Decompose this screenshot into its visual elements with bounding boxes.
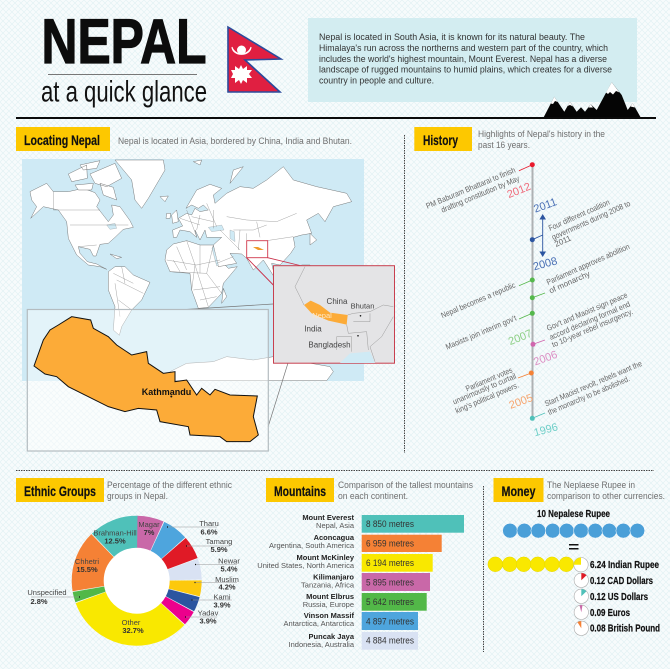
heading: Locating Nepal: Locating Nepal <box>24 132 100 148</box>
donut labels: 5.4% <box>220 564 238 574</box>
donut labels: Chhetri <box>75 557 99 566</box>
timeline event: 2007: Maoists join interim gov't <box>444 313 518 352</box>
panel: introduction: includes the world's highest mountain, Mount Everest. Nepal has a diverse <box>319 54 607 64</box>
panel: introduction: country in people and culture. <box>319 76 434 86</box>
heading: Locating Nepal <box>16 127 110 151</box>
timeline event: 1996: 1996 <box>533 421 559 439</box>
timeline event: abolition of monarchy: of monarchy <box>548 269 592 295</box>
donut labels: Magar <box>138 520 160 529</box>
donut labels: 12.5% <box>104 536 126 546</box>
pie wedges <box>574 558 586 628</box>
timeline event: 2012: 2012 <box>505 181 533 201</box>
panel: regional inset map <box>247 258 394 363</box>
timeline event: 1996 <box>530 359 644 439</box>
chart: mountains bar chart: Aconcagua <box>314 533 355 542</box>
chart: mountains bar chart: 5 642 metres <box>366 597 414 607</box>
heading: History: History <box>423 132 458 148</box>
timeline event: 1996: Start Maoist revolt, rebels want the <box>543 359 644 408</box>
text: locating description: Nepal is located in Asia, bordered by China, India and Bhutan. <box>118 136 352 146</box>
chart: mountains bar chart: Mount McKinley <box>296 553 355 562</box>
chart: mountains bar chart: Mount Everest <box>302 513 354 522</box>
chart: mountains bar chart: 4 897 metres <box>366 616 414 626</box>
text: money description: The Neplaese Rupee in <box>547 480 635 490</box>
timeline event: 2006: 2006 <box>532 349 559 368</box>
donut labels: Muslim <box>215 575 239 584</box>
map highlight: Nepal locator <box>247 241 268 258</box>
panel: Nepal enlarged map: Kathmandu <box>142 387 191 397</box>
panel: regional inset map: India <box>304 324 322 334</box>
currency labels <box>590 560 660 634</box>
donut labels: 5.9% <box>210 545 228 554</box>
text: history description: Highlights of Nepal's history in the <box>478 129 605 139</box>
chart: mountains bar chart: Vinson Massif <box>304 611 354 620</box>
donut labels: Other <box>122 618 141 627</box>
chart: mountains bar chart: 4 884 metres <box>366 636 414 646</box>
donut labels: Newar <box>218 556 240 566</box>
timeline event: republic: Nepal becomes a republic <box>440 281 517 320</box>
title: NEPAL <box>42 7 206 77</box>
heading: Mountains <box>266 478 334 502</box>
map: South America <box>108 267 150 335</box>
timeline event: 2012: PM Baburam Bhattarai to finish <box>425 166 517 211</box>
text: history description <box>478 129 605 150</box>
donut labels: 3.9% <box>213 600 231 610</box>
timeline event: abolition of monarchy: Parliament approves abolition <box>545 242 631 287</box>
timeline event: 2006 <box>530 290 634 368</box>
timeline event: 2005: unanimously to curtail <box>451 371 518 406</box>
equals sign <box>569 544 578 550</box>
timeline event: 2008 to 2011: 2011 <box>553 233 573 249</box>
map: Antarctica <box>167 357 333 381</box>
map: Africa <box>165 241 237 308</box>
chart: history timeline <box>425 162 644 439</box>
chart: mountains bar chart: Kilimanjaro <box>313 572 354 582</box>
donut labels: Tharu <box>199 519 219 528</box>
map: North America <box>30 183 133 269</box>
chart: mountains bar chart: Russia, Europe <box>303 600 354 609</box>
panel: regional inset map: Nepal <box>312 311 332 320</box>
divider: money <box>482 486 484 652</box>
chart: mountains bar chart: Tanzania, Africa <box>301 580 355 590</box>
divider: header <box>16 117 656 119</box>
donut labels <box>27 519 240 635</box>
heading: Ethnic Groups <box>16 478 104 502</box>
chart: mountains bar chart: Antarctica, Antarctica <box>284 619 355 628</box>
timeline event: 2012: drafting constitution by May <box>440 174 521 215</box>
panel: introduction: Nepal is located in South Asia, it is known for its natural beauty. The <box>319 32 585 42</box>
panel: regional inset map: Bhutan <box>351 302 374 310</box>
chart: currency comparison <box>488 509 660 636</box>
currency labels: 0.12 US Dollars <box>590 592 648 603</box>
donut labels: 32.7% <box>122 626 144 635</box>
chart: mountains bar chart: Nepal, Asia <box>316 521 355 530</box>
coins: Indian Rupee <box>488 557 574 572</box>
map: Arctic islands <box>68 161 122 200</box>
text: ethnic description: groups in Nepal. <box>107 491 168 501</box>
coins: 10 Nepalese Rupee <box>503 523 645 538</box>
timeline event: 2008 to 2011: governments during 2008 to <box>550 199 632 242</box>
timeline event: abolition of monarchy <box>530 242 631 300</box>
timeline event: 2005: Parliament votes <box>464 366 514 393</box>
donut labels: Tamang <box>206 537 232 546</box>
divider: history <box>404 135 406 453</box>
map: Greenland <box>115 160 165 208</box>
text: ethnic description: Percentage of the different ethnic <box>107 480 232 490</box>
icon: mountains <box>543 82 641 118</box>
text: mountains description: Comparison of the tallest mountains <box>338 480 473 490</box>
timeline event: 2005: king's political powers. <box>454 381 520 415</box>
chart: mountains bar chart: Puncak Jaya <box>309 632 355 641</box>
timeline event: 2008 to 2011: 2011 <box>532 196 559 216</box>
fraction pies <box>574 558 588 636</box>
map: country borders <box>53 192 297 317</box>
chart: mountains bar chart: 6 959 metres <box>366 538 414 548</box>
text: mountains description <box>338 480 473 501</box>
donut labels: 6.6% <box>200 528 218 536</box>
donut labels: Brahman-Hill <box>93 528 137 538</box>
donut labels: 2.8% <box>30 597 48 606</box>
timeline event: 2008 to 2011: Four different coalition <box>547 198 611 233</box>
icon: flag of Nepal <box>228 27 281 92</box>
currency labels: 0.12 CAD Dollars <box>590 576 653 587</box>
heading: Mountains: Mountains <box>274 483 326 499</box>
timeline event: 2006: to 10-year rebel insurgency. <box>551 307 634 349</box>
donut labels: Unspecified <box>27 588 67 597</box>
divider: lower section <box>16 470 654 472</box>
chart: mountains bar chart: United States, North America <box>257 561 355 570</box>
chart: currency comparison: 10 Nepalese Rupee <box>537 509 610 520</box>
donut labels: Yadav <box>198 608 219 618</box>
chart: mountains bar chart: Mount Elbrus <box>306 592 354 601</box>
chart: mountains bar chart <box>257 513 464 650</box>
timeline event: 2008 to 2011 <box>530 196 632 273</box>
text: mountains description: on each continent. <box>338 491 408 501</box>
title <box>41 7 207 108</box>
chart: mountains bar chart: Indonesia, Australia <box>289 640 355 649</box>
currency labels: 0.09 Euros <box>590 608 630 619</box>
chart: mountains bar chart: 8 850 metres <box>366 519 414 529</box>
timeline event: 2006: accord declaring formal end <box>548 300 632 342</box>
heading: Ethnic Groups: Ethnic Groups <box>24 483 96 499</box>
title: at a quick glance <box>41 76 207 108</box>
chart: mountains bar chart: Argentina, South America <box>269 541 355 550</box>
heading: Money <box>494 478 544 502</box>
heading: History <box>414 127 472 151</box>
map: Eurasia <box>173 167 352 278</box>
heading: Money: Money <box>502 483 536 499</box>
chart: mountains bar chart: 5 895 metres <box>366 578 414 588</box>
map: islands <box>110 160 317 303</box>
text: history description: past 16 years. <box>478 140 530 150</box>
timeline event: 2008 to 2011: 2008 <box>532 255 559 273</box>
donut leader lines <box>31 527 237 617</box>
chart: mountains bar chart: 6 194 metres <box>366 558 414 568</box>
donut labels: 4.2% <box>218 582 236 592</box>
timeline event: 2006: Gov't and Maoist sign peace <box>545 290 629 333</box>
panel: introduction: landscape of rugged mountains to humid plains, which creates for a diverse <box>319 64 612 74</box>
timeline event: 1996: the monarchy to be abolished. <box>547 374 631 417</box>
panel: introduction <box>308 18 637 102</box>
panel: Nepal enlarged map <box>27 310 268 451</box>
timeline event: 2007: 2007 <box>507 328 534 348</box>
text: ethnic description <box>107 480 232 501</box>
connector lines <box>185 304 288 427</box>
panel: regional inset map: Bangladesh <box>308 340 351 350</box>
panel: world map <box>22 159 364 381</box>
map: inland seas <box>107 223 235 266</box>
chart: ethnic groups donut <box>27 519 240 635</box>
donut labels: 15.5% <box>76 565 98 574</box>
panel: regional inset map: China <box>327 297 348 306</box>
text: money description <box>547 480 665 501</box>
donut labels: 7% <box>144 528 155 537</box>
donut labels: Kami <box>213 592 231 602</box>
panel: introduction: Himalaya's run across the northerns and western part of the country, which <box>319 43 608 53</box>
timeline event: 2005: 2005 <box>507 392 535 412</box>
text: money description: comparison to other currencies. <box>547 491 665 501</box>
donut labels: 3.9% <box>199 616 217 626</box>
